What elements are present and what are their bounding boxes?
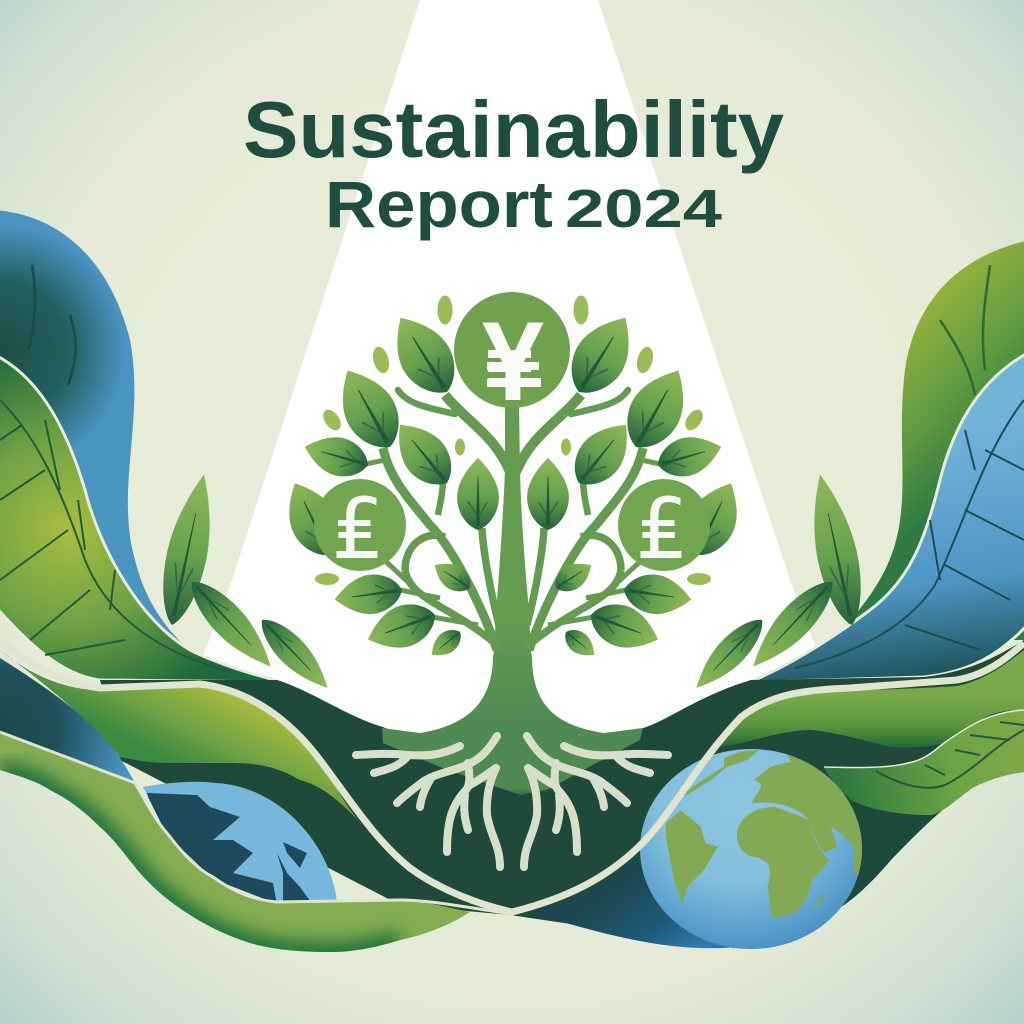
small leaf left middle (180, 571, 283, 678)
left lower green band (0, 732, 470, 954)
yen symbol: ¥ (482, 299, 544, 424)
left lime band (0, 650, 362, 825)
right blue leaf veins (795, 400, 1024, 668)
small leaf right middle (741, 571, 844, 678)
left lime leaf veins (0, 400, 230, 672)
right band highlight line (824, 710, 1024, 768)
roots left (356, 736, 500, 867)
left blue leaf veins (28, 265, 76, 385)
small leaf left upper (153, 470, 223, 629)
left earth ocean (143, 782, 337, 900)
trunk lower and soil mound (382, 655, 643, 795)
yen bars (488, 350, 541, 387)
right green leaf veins (940, 265, 990, 395)
right large leaves (750, 240, 1024, 682)
left lime leaf (0, 355, 282, 682)
right green leaf (835, 240, 1024, 640)
roots (356, 736, 668, 867)
left large leaves (0, 210, 282, 682)
title line 1: Sustainability (243, 85, 785, 174)
small leaves right (686, 470, 871, 698)
cream outline of lower green band (0, 732, 512, 914)
dark valley (100, 640, 1024, 948)
left earth land (147, 793, 313, 905)
tree left half (274, 296, 510, 663)
right band vein (876, 722, 1024, 788)
right green band lower (824, 710, 1024, 815)
right green band upper (717, 650, 1024, 748)
Eurasia (752, 754, 862, 875)
currency symbol right: ₤ (635, 480, 689, 578)
coin top (454, 292, 570, 424)
spotlight beam (190, 0, 835, 745)
right earth continents (666, 750, 862, 918)
title year: 2024 (565, 179, 722, 239)
tree right half (516, 296, 752, 663)
currency symbol left: ₤ (331, 480, 385, 578)
left earth (143, 782, 337, 900)
small leaf left lower (252, 610, 338, 698)
coin right (618, 479, 710, 578)
Africa (737, 807, 829, 918)
title line 2: Report (325, 167, 553, 241)
coin left (314, 479, 406, 578)
Madagascar (812, 892, 826, 907)
right blue leaf (750, 352, 1024, 682)
small leaf right upper (801, 470, 871, 629)
cream outline of valley (0, 640, 1024, 912)
small leaf right lower (686, 610, 772, 698)
tree (274, 292, 752, 795)
right earth (640, 749, 862, 949)
small leaves left (153, 470, 338, 698)
roots right (524, 736, 668, 867)
title (243, 85, 785, 241)
right lower blue band (530, 830, 760, 948)
trunk (493, 405, 532, 665)
left blue leaf (0, 210, 195, 655)
left lower blue band (0, 658, 135, 783)
right earth ocean (640, 749, 862, 949)
Greenland and North America (681, 750, 759, 797)
band lower shading (0, 772, 400, 954)
South America (666, 810, 718, 905)
